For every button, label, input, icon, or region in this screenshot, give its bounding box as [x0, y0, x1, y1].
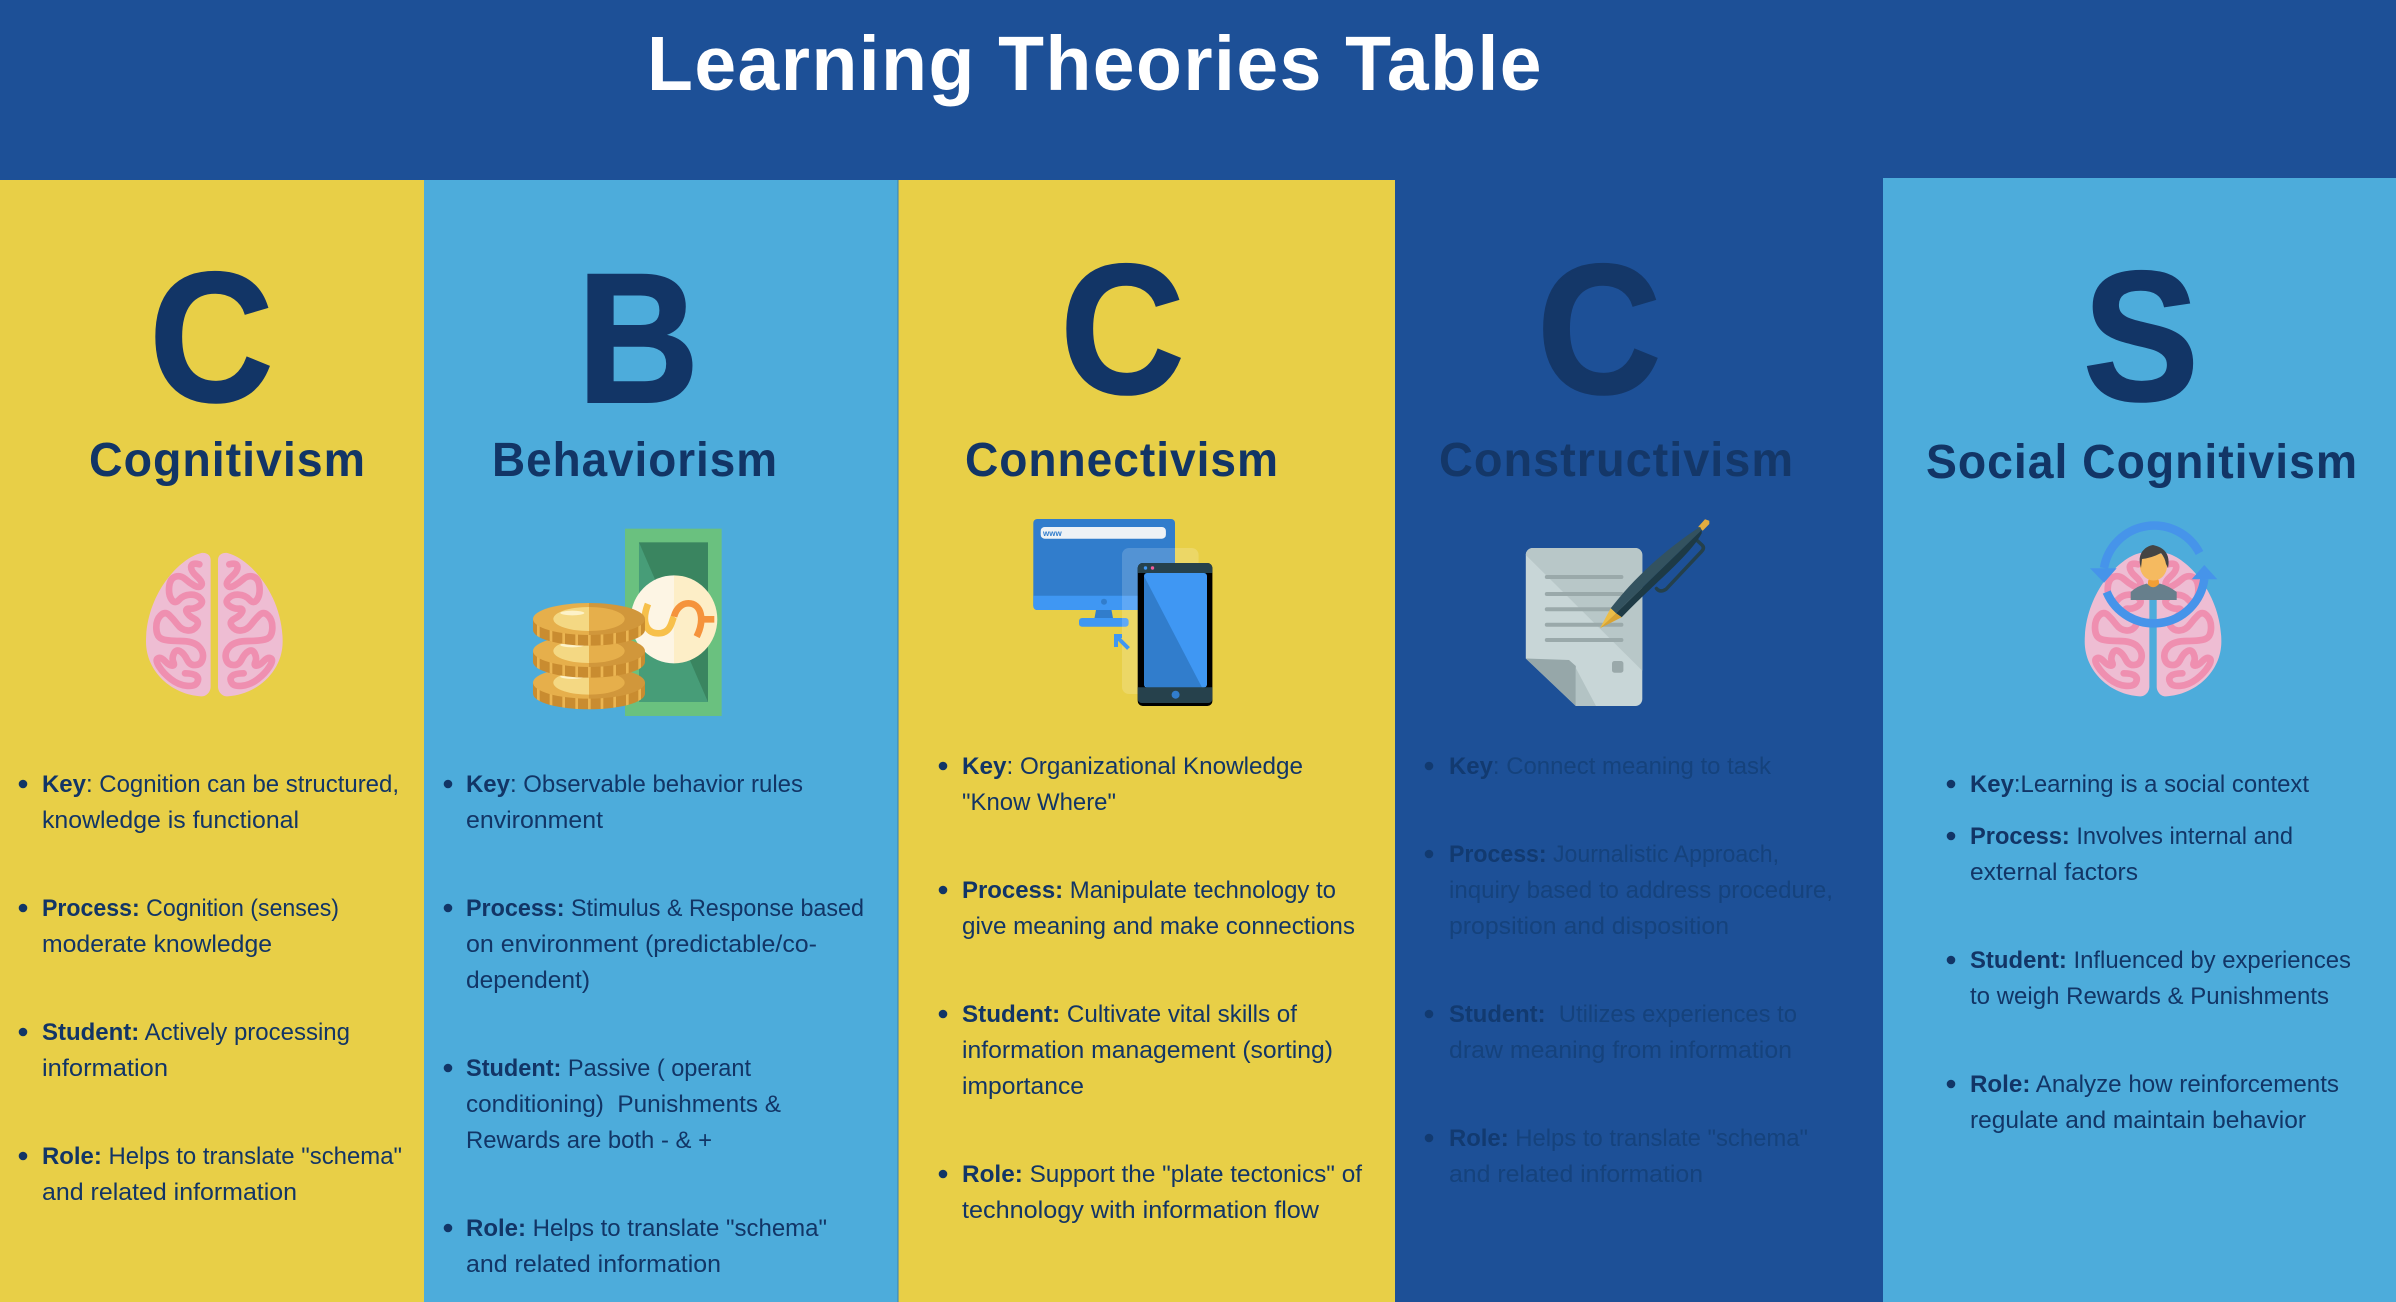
process point	[1425, 841, 1833, 940]
process point: external factors	[1970, 859, 2138, 886]
list: constructivism points	[1425, 753, 1833, 1188]
letter C: C	[149, 233, 273, 440]
role point	[1947, 1071, 2339, 1134]
panel: constructivism	[1395, 180, 1883, 1302]
process point: on environment (predictable/co-	[466, 931, 817, 958]
student point: Student: Cultivate vital skills of	[962, 1001, 1297, 1028]
process point: inquiry based to address procedure,	[1449, 877, 1833, 904]
list: connectivism points	[939, 753, 1362, 1224]
process point	[939, 877, 1355, 940]
process point: Process: Stimulus & Response based	[466, 895, 864, 922]
student point	[1947, 947, 2351, 1010]
key point	[939, 753, 1303, 816]
key point: environment	[466, 807, 603, 834]
role point	[444, 1215, 827, 1278]
student point: Student: Passive ( operant	[466, 1055, 751, 1082]
icon: brain	[146, 553, 283, 696]
key point: knowledge is functional	[42, 807, 299, 834]
key point: Key:Learning is a social context	[1970, 771, 2309, 798]
role point	[939, 1161, 1362, 1224]
icon: monitor and phone	[1033, 519, 1212, 706]
heading: Connectivism: Connectivism	[965, 434, 1279, 487]
list: social cognitivism points	[1947, 771, 2351, 1134]
key point: Key: Observable behavior rules	[466, 771, 803, 798]
key point: Key: Connect meaning to task	[1449, 753, 1772, 780]
student point: importance	[962, 1073, 1084, 1100]
process point: Process: Involves internal and	[1970, 823, 2293, 850]
list: cognitivism points	[19, 771, 402, 1206]
role point: Role: Support the "plate tectonics" of	[962, 1161, 1362, 1188]
letter B: B	[577, 234, 699, 442]
role point	[19, 1143, 402, 1206]
role point	[1425, 1125, 1808, 1188]
process point: propsition and disposition	[1449, 913, 1729, 940]
student point: conditioning) Punishments &	[466, 1091, 781, 1118]
process point: give meaning and make connections	[962, 913, 1355, 940]
process point: Process: Manipulate technology to	[962, 877, 1336, 904]
letter C: C	[1537, 225, 1661, 432]
letter C: C	[1060, 225, 1184, 432]
student point: Student: Actively processing	[42, 1019, 350, 1046]
heading: Social Cognitivism: Social Cognitivism	[1926, 436, 2358, 489]
heading: Behaviorism: Behaviorism	[492, 434, 778, 487]
icon: money and coins	[533, 529, 722, 716]
student point	[1425, 1001, 1797, 1064]
key point: "Know Where"	[962, 789, 1116, 816]
role point: Role: Helps to translate "schema"	[466, 1215, 827, 1242]
panel: cognitivism	[0, 180, 424, 1302]
role point: technology with information flow	[962, 1197, 1320, 1224]
student point: Student: Influenced by experiences	[1970, 947, 2351, 974]
role point: Role: Helps to translate "schema"	[42, 1143, 402, 1170]
process point: Process: Cognition (senses)	[42, 895, 339, 922]
key point	[19, 771, 399, 834]
student point	[19, 1019, 350, 1082]
role point: and related information	[466, 1251, 721, 1278]
student point: information management (sorting)	[962, 1037, 1333, 1064]
process point	[444, 895, 864, 994]
student point: to weigh Rewards & Punishments	[1970, 983, 2329, 1010]
icon: document and pen	[1526, 519, 1709, 706]
key point: Key: Cognition can be structured,	[42, 771, 399, 798]
student point: Student: Utilizes experiences to	[1449, 1001, 1797, 1028]
icon: cursor arrow	[1116, 636, 1128, 648]
student point: Rewards are both - & +	[466, 1127, 712, 1154]
icon: monitor and phone: www	[1042, 529, 1062, 538]
process point: Process: Journalistic Approach,	[1449, 841, 1779, 868]
student point: information	[42, 1055, 168, 1082]
icon: brain with person and cycle arrows	[2085, 526, 2221, 696]
process point	[1947, 823, 2293, 886]
process point	[19, 895, 339, 958]
process point: dependent)	[466, 967, 590, 994]
process point: moderate knowledge	[42, 931, 272, 958]
role point: Role: Analyze how reinforcements	[1970, 1071, 2339, 1098]
role point: regulate and maintain behavior	[1970, 1107, 2306, 1134]
title: Learning Theories Table	[647, 21, 1543, 107]
panel: connectivism	[898, 180, 1395, 1302]
role point: Role: Helps to translate "schema"	[1449, 1125, 1808, 1152]
student point	[939, 1001, 1333, 1100]
panel: behaviorism	[424, 180, 898, 1302]
key point: Key: Organizational Knowledge	[962, 753, 1303, 780]
key point	[444, 771, 803, 834]
role point: and related information	[42, 1179, 297, 1206]
letter S: S	[2083, 233, 2199, 440]
student point: draw meaning from information	[1449, 1037, 1792, 1064]
student point	[444, 1055, 781, 1154]
panel: social cognitivism	[1883, 178, 2396, 1302]
list: behaviorism points	[444, 771, 864, 1278]
heading: Cognitivism: Cognitivism	[89, 434, 366, 487]
role point: and related information	[1449, 1161, 1703, 1188]
heading: Constructivism: Constructivism	[1439, 434, 1794, 487]
